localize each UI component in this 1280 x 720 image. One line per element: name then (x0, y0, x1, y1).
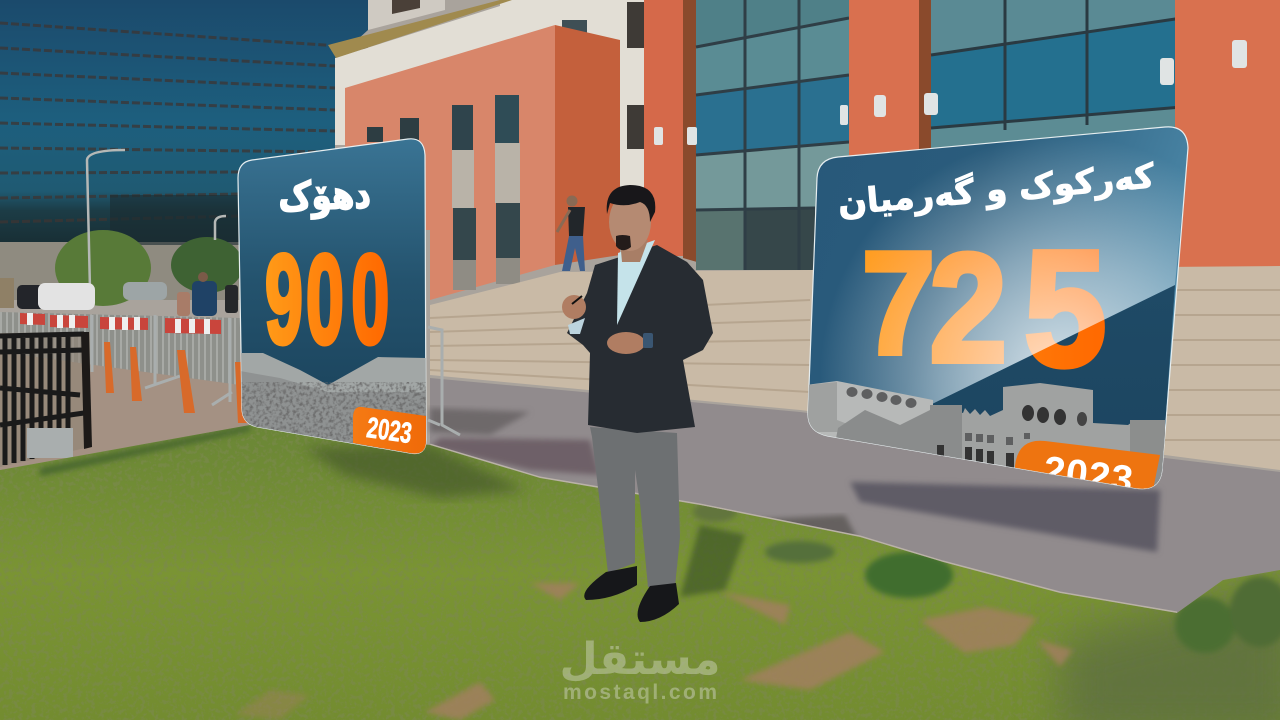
eyes and goatee (616, 235, 631, 250)
year badge (1015, 440, 1160, 489)
year badge: 2023 (365, 412, 414, 450)
number: 725: 2 (930, 222, 1007, 395)
city photo (241, 353, 426, 454)
watermark: mostaql.com (563, 681, 717, 704)
bollards (104, 342, 247, 423)
stone steps (430, 266, 1280, 470)
presenter (562, 185, 713, 622)
road (430, 378, 1280, 613)
hands, cuff, watch (562, 295, 653, 354)
shirt (617, 240, 655, 325)
wall lights (654, 40, 1247, 145)
dirt patches (235, 583, 1073, 720)
glass facade with brick piers (644, 0, 1280, 270)
year badge (353, 407, 426, 454)
castle photo (806, 381, 1165, 495)
shrubs (693, 502, 1280, 653)
white building section (328, 0, 645, 200)
barriers (0, 312, 240, 405)
number: 725: 5 (1024, 218, 1106, 401)
jacket (567, 245, 713, 433)
trousers (590, 427, 680, 587)
left background: trees, cars, street lamps, people (0, 150, 243, 316)
number: 900: 900 (265, 230, 389, 370)
year badge: 2023 (1041, 449, 1136, 502)
heading: Duhok: دهۆک (277, 170, 372, 220)
orange block (345, 25, 620, 300)
heading: Kirkuk and Garmian: کەرکوک و گەرمیان (836, 156, 1156, 224)
black fence (0, 332, 92, 467)
grass (0, 420, 1280, 720)
light beam overlay (808, 127, 1188, 440)
hair (607, 185, 655, 222)
office tower (0, 0, 445, 300)
panel: Kirkuk and Garmian card (806, 127, 1188, 502)
head (609, 193, 651, 251)
panel: Duhok card (238, 139, 430, 462)
pavement (0, 340, 250, 470)
lower right dark section (900, 285, 1175, 470)
walking person on the steps (557, 196, 585, 271)
watermark: مستقل (560, 634, 720, 685)
right barrier behind card (428, 327, 460, 435)
shoes (584, 566, 679, 622)
neck (620, 240, 648, 262)
number: 725: 7 (862, 223, 935, 385)
